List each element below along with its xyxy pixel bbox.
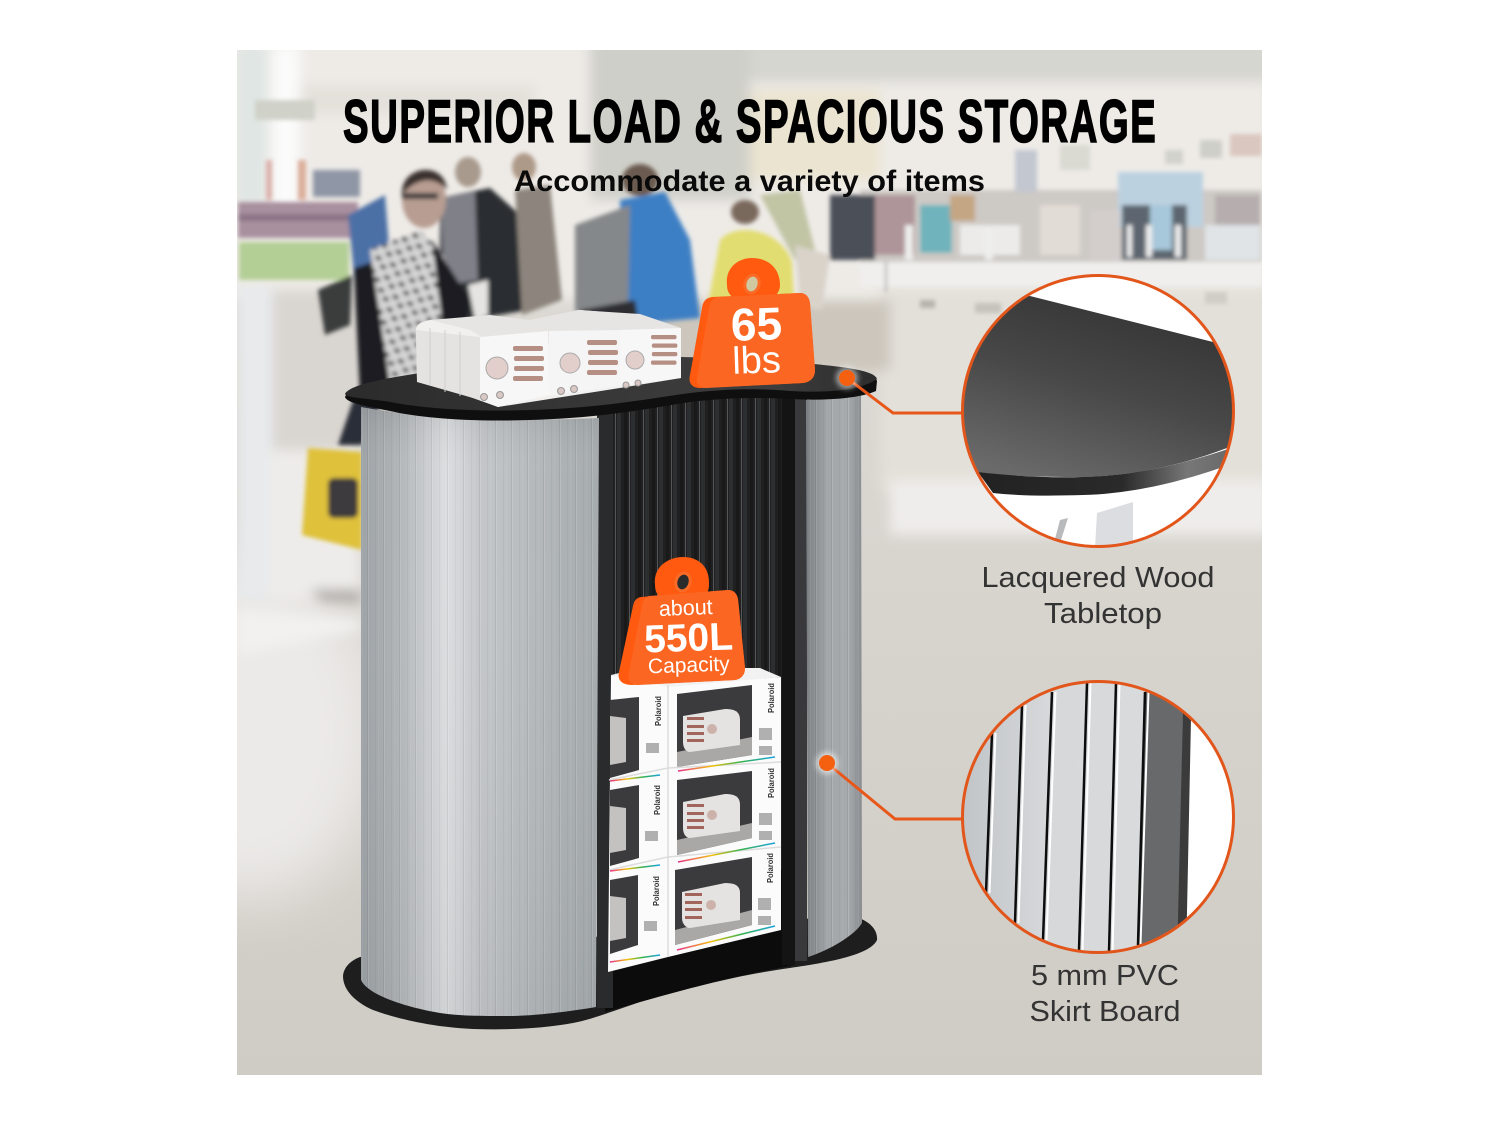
kiosk counter [343,357,877,1029]
Polaroid box labels: Polaroid [652,785,662,815]
leader line to tabletop detail [847,378,963,413]
label: Lacquered Wood [982,562,1214,594]
weight badge: about 550L capacity [619,557,745,685]
weight badge: about 550L capacity: about [658,595,713,621]
Polaroid box labels [651,683,776,906]
man in blue shirt with backpack [622,164,658,196]
base [343,915,877,1029]
magnified tabletop circle [955,276,1240,548]
crowd, far right [860,190,1262,262]
label line two: Skirt Board [1030,996,1180,1028]
weight badge: about 550L capacity: Capacity [648,653,731,678]
right curved silver panel [806,395,862,957]
magnified panel circle [950,670,1234,960]
subtitle: Accommodate a variety of items [514,165,985,198]
radios in photos [683,709,740,752]
callout: lacquered wood tabletop [836,276,1240,594]
stacked product boxes [608,668,781,972]
Polaroid box labels: Polaroid [766,683,776,713]
speakers on tabletop [416,310,681,407]
left curved silver panel [361,407,599,1016]
Polaroid box labels: Polaroid [765,853,775,883]
weight badge: 65 lbs [689,258,815,388]
marker dot [836,367,858,389]
right frame [782,395,795,965]
box photos, left column [610,697,639,778]
column and row divides [609,685,781,957]
label line two: Tabletop [1044,598,1162,630]
leader line to skirt board detail [827,763,963,819]
left frame [597,412,613,1008]
lacquered tabletop [345,359,877,421]
Polaroid box labels: Polaroid [766,768,776,798]
blurred exhibition hall background photo [237,50,1262,1075]
interior ribbed back wall [605,395,795,880]
yellow shopping bag [302,448,362,550]
man in dark coat and checked shirt [455,157,481,187]
man in beige jacket [512,153,536,181]
weight badge: 65 lbs: lbs [732,339,782,383]
box photos, right column [677,685,752,767]
yellow shirt and people behind weight [706,227,796,299]
stadium poster [238,202,358,238]
callout: 5 mm PVC skirt board [816,670,1234,992]
woman with leopard dress [348,195,392,285]
Polaroid box labels: Polaroid [651,876,661,906]
Polaroid box labels: Polaroid [653,696,663,726]
label: 5 mm PVC [1031,960,1179,992]
title: SUPERIOR LOAD & SPACIOUS STORAGE [343,87,1156,155]
weight badge: 65 lbs: 65 [730,297,783,351]
weight badge: about 550L capacity: 550L [643,615,734,662]
marker dot [816,752,838,774]
rainbow strips [610,757,775,962]
